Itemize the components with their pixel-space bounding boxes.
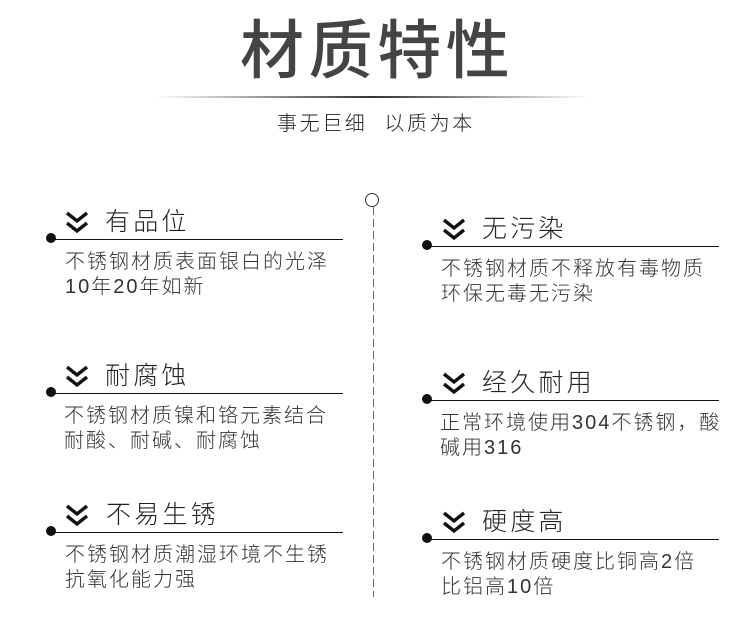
item: 经久耐用 (422, 369, 721, 459)
body text: 耐酸、耐碱、耐腐蚀 (64, 430, 262, 452)
body text (65, 251, 329, 298)
rule (50, 532, 343, 533)
heading: 无污染 (482, 215, 567, 243)
subtitle: 事无巨细 以质为本 (277, 113, 475, 135)
body text: 不锈钢材质硬度比铜高2倍 (441, 551, 696, 573)
body text: 抗氧化能力强 (65, 569, 197, 591)
body text (441, 551, 696, 598)
timeline dashed line (373, 207, 374, 597)
body text: 不锈钢材质潮湿环境不生锈 (65, 544, 329, 566)
marker dot (422, 394, 432, 404)
heading: 不易生锈 (106, 501, 219, 529)
body text: 不锈钢材质镍和铬元素结合 (64, 405, 328, 427)
marker dot (422, 533, 432, 543)
icon: double chevron (443, 512, 465, 534)
body text: 10年20年如新 (65, 276, 206, 298)
rule (426, 246, 719, 247)
rule (426, 400, 719, 401)
item: 不易生锈 (46, 501, 343, 591)
icon: double chevron (66, 504, 88, 526)
icon: double chevron (66, 366, 88, 388)
body text: 环保无毒无污染 (441, 283, 595, 305)
body text (440, 412, 721, 459)
icon: double chevron (443, 372, 465, 394)
heading: 有品位 (105, 208, 190, 236)
body text (441, 258, 705, 305)
marker dot (422, 240, 432, 250)
item: 硬度高 (422, 508, 719, 598)
heading: 硬度高 (482, 508, 567, 536)
icon: double chevron (443, 218, 465, 240)
body text: 正常环境使用304不锈钢，酸 (440, 412, 721, 434)
body text: 不锈钢材质不释放有毒物质 (441, 258, 705, 280)
icon: double chevron (66, 212, 88, 234)
heading: 耐腐蚀 (105, 362, 190, 390)
heading: 经久耐用 (482, 369, 595, 397)
body text: 碱用316 (440, 437, 523, 459)
rule (50, 238, 343, 240)
body text: 不锈钢材质表面银白的光泽 (65, 251, 329, 273)
marker dot (46, 387, 56, 397)
timeline circle (365, 193, 379, 207)
body text: 比铝高10倍 (441, 576, 555, 598)
rule (50, 392, 343, 394)
item: 有品位 (46, 208, 343, 298)
body text (65, 544, 329, 591)
marker dot (46, 233, 56, 243)
title gradient divider (155, 96, 590, 98)
marker dot (46, 526, 56, 536)
rule (426, 538, 719, 540)
item: 无污染 (422, 215, 719, 305)
title: 材质特性 (240, 15, 514, 87)
body text (64, 404, 328, 452)
item: 耐腐蚀 (46, 362, 343, 452)
